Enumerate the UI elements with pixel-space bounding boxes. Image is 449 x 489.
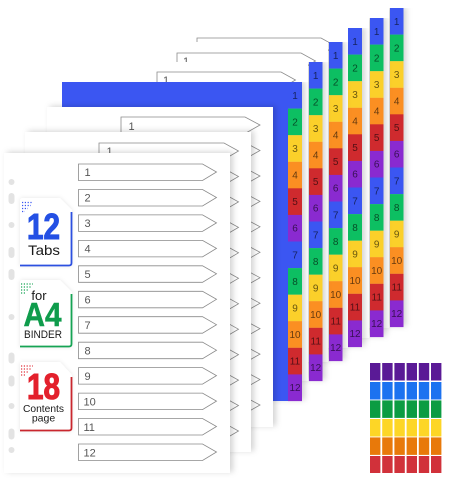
numbered index tabs: 10	[84, 396, 96, 408]
contents sheet 1	[25, 132, 251, 452]
divider sheet 4: 10	[310, 310, 322, 321]
divider sheet 7: 12	[371, 319, 383, 330]
badge: 12 Tabs: 12	[27, 206, 60, 247]
divider sheet 4: 8	[313, 257, 319, 268]
badge: 12 Tabs	[20, 198, 72, 266]
divider sheet 6: 7	[352, 196, 358, 207]
divider sheet 6: 12	[349, 329, 361, 340]
divider sheet 6: 4	[352, 117, 358, 128]
divider sheet 7	[143, 18, 384, 338]
divider sheet 5: 3	[333, 104, 339, 115]
divider sheet 6	[122, 28, 362, 348]
colour label sticker sheet	[370, 363, 441, 473]
divider sheet 4: 6	[313, 204, 319, 215]
numbered index tabs: 4	[84, 244, 91, 256]
divider sheet 5: 11	[331, 317, 341, 328]
blue divider sheet: 6	[292, 224, 298, 235]
badge: for A4 binder	[20, 280, 72, 347]
divider sheet 7: 1	[374, 27, 380, 38]
divider sheet 7: 11	[372, 293, 382, 304]
badge: for A4 binder: BINDER	[24, 329, 62, 341]
divider sheet 4: 11	[311, 337, 321, 348]
divider sheet 8 (back): 10	[391, 256, 403, 267]
sheet background	[4, 153, 230, 473]
numbered index tabs: 6	[84, 294, 91, 306]
divider sheet 8 (back): 6	[394, 150, 400, 161]
divider sheet 4: 9	[313, 284, 319, 294]
divider sheet 4: 7	[313, 230, 319, 241]
blue divider sheet: 2	[292, 117, 298, 128]
numbered index tabs: 1	[84, 167, 91, 179]
divider sheet 6: 8	[352, 223, 358, 234]
numbered index tabs: 8	[84, 346, 91, 358]
divider sheet 7: 6	[374, 160, 380, 171]
contents sheet 1: 1	[106, 146, 113, 158]
blue divider sheet: 11	[290, 357, 301, 368]
divider sheet 8 (back): 12	[391, 309, 403, 320]
divider sheet 4: 5	[313, 177, 319, 188]
divider sheet 7: 2	[374, 53, 380, 64]
numbered index tabs: 5	[84, 269, 91, 281]
divider sheet 7: 8	[374, 213, 380, 224]
divider sheet 7: 3	[374, 80, 380, 91]
divider sheet 4: 12	[310, 363, 322, 374]
divider sheet 8 (back): 9	[394, 230, 400, 240]
divider sheet 7: 7	[374, 186, 380, 197]
divider sheet 6: 6	[352, 170, 358, 181]
divider sheet 6: 10	[349, 276, 361, 287]
divider sheet 5: 1	[183, 56, 189, 68]
numbered index tabs: 11	[84, 422, 95, 434]
divider sheet 8 (back)	[163, 8, 404, 328]
numbered index tabs: 3	[84, 218, 91, 230]
badge: 18 Contents page	[20, 362, 72, 431]
blue divider sheet: 10	[289, 330, 301, 341]
divider sheet 5: 2	[333, 77, 339, 88]
badge: for A4 binder: A4	[24, 296, 62, 333]
divider sheet 4: 1	[163, 75, 169, 87]
badge: 12 Tabs: Tabs	[28, 242, 60, 258]
contents sheet 2	[47, 107, 273, 427]
badge: 18 Contents page: page	[32, 412, 55, 424]
badge: 18 Contents page: 18	[27, 366, 60, 407]
blue divider sheet: 3	[292, 144, 298, 155]
front contents sheet	[4, 153, 230, 473]
divider sheet 5: 1	[333, 51, 339, 62]
red sticker row	[370, 456, 441, 473]
divider sheet 6: 11	[350, 303, 361, 314]
divider sheet 5: 6	[333, 184, 339, 195]
divider sheet 7: 10	[371, 266, 383, 277]
badge: 18 Contents page: Contents	[23, 403, 64, 415]
blue divider sheet: 7	[292, 250, 298, 261]
punch holes	[8, 179, 14, 453]
green sticker row	[370, 400, 441, 418]
divider sheet 7: 4	[374, 107, 380, 118]
divider sheet 8 (back): 3	[394, 70, 400, 81]
divider sheet 8 (back): 8	[394, 203, 400, 214]
divider sheet 5	[102, 41, 342, 362]
divider sheet 5: 7	[333, 210, 339, 221]
divider sheet 4: 3	[313, 124, 319, 135]
blue divider sheet: 8	[292, 277, 298, 288]
badge: for A4 binder: for	[31, 288, 47, 303]
numbered index tabs: 7	[84, 320, 91, 332]
divider sheet 8 (back): 2	[394, 43, 400, 54]
orange sticker row	[370, 437, 441, 455]
divider sheet 8 (back): 5	[394, 123, 400, 134]
purple sticker row	[370, 363, 441, 380]
divider sheet 7: 9	[374, 240, 380, 250]
divider sheet 8 (back): 7	[394, 176, 400, 187]
blue sticker row	[370, 382, 441, 400]
divider sheet 6: 9	[352, 250, 358, 260]
numbered index tabs: 2	[84, 192, 91, 204]
divider sheet 8 (back): 4	[394, 97, 400, 108]
divider sheet 5: 4	[333, 131, 339, 142]
contents sheet 2: 1	[128, 121, 135, 133]
numbered index tabs: 9	[84, 371, 91, 383]
blue divider sheet: 1	[292, 91, 298, 102]
divider sheet 8 (back): 11	[392, 283, 402, 294]
divider sheet 5: 9	[333, 264, 339, 274]
divider sheet 5: 12	[330, 343, 342, 354]
numbered index tabs: 12	[84, 448, 96, 460]
divider sheet 4	[82, 62, 322, 381]
divider sheet 6: 1	[352, 37, 358, 48]
blue divider sheet: 9	[292, 304, 298, 314]
divider sheet 6: 2	[352, 63, 358, 74]
blue divider sheet: 4	[292, 171, 298, 182]
divider sheet 5: 8	[333, 237, 339, 248]
numbered index tabs	[78, 164, 216, 460]
divider sheet 4: 1	[313, 71, 319, 82]
blue divider sheet: 5	[292, 197, 298, 208]
divider sheet 5: 10	[330, 290, 342, 301]
divider sheet 6: 5	[352, 143, 358, 154]
blue divider sheet	[62, 82, 302, 401]
yellow sticker row	[370, 419, 441, 436]
divider sheet 7: 5	[374, 133, 380, 144]
divider sheet 6: 3	[352, 90, 358, 101]
divider sheet 5: 5	[333, 157, 339, 168]
blue divider sheet: 12	[289, 383, 301, 394]
divider sheet 8 (back): 1	[394, 17, 400, 28]
divider sheet 4: 2	[313, 97, 319, 108]
divider sheet 4: 4	[313, 151, 319, 162]
